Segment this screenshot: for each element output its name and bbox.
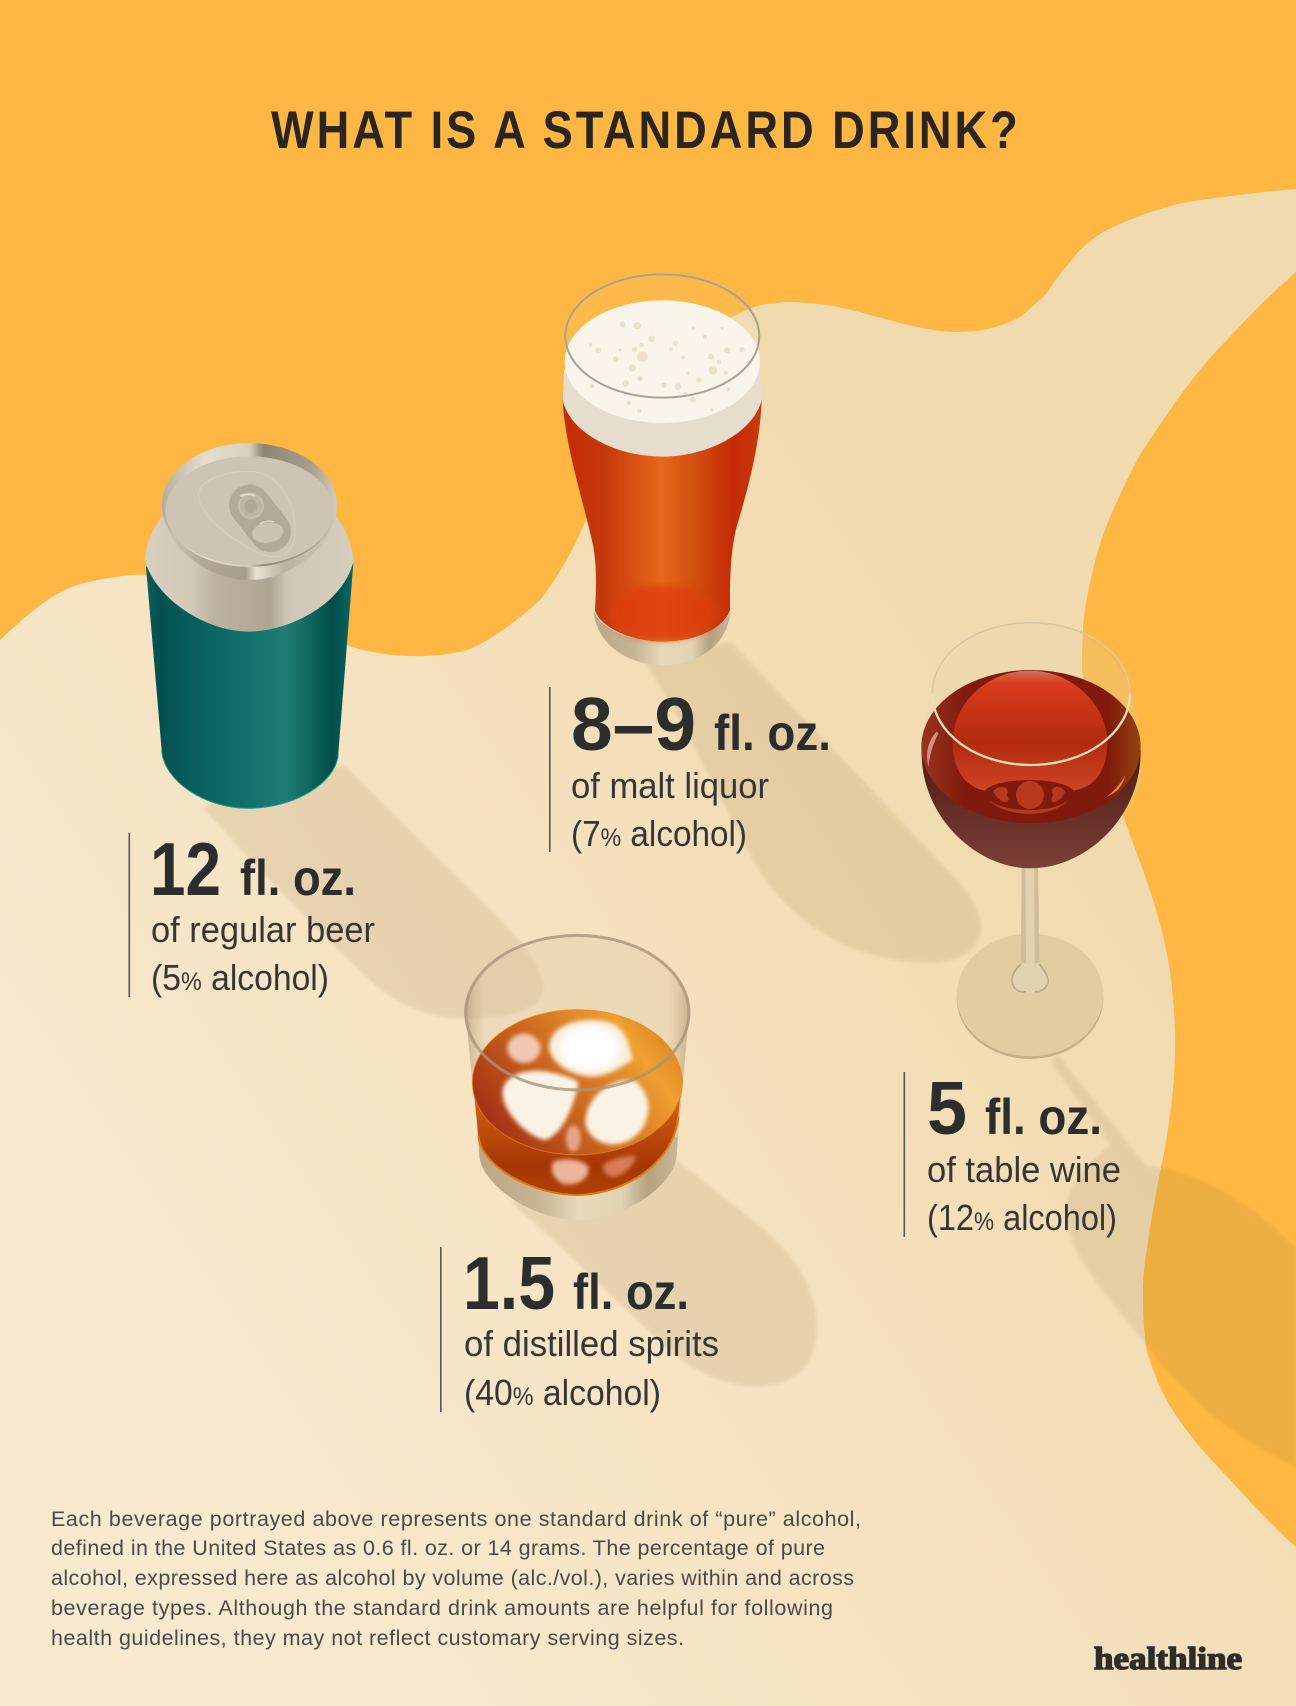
glass base (479, 1137, 678, 1220)
beer can illustration (145, 443, 353, 808)
foam side (563, 367, 762, 457)
beer bottom glow (609, 585, 716, 640)
stem reflection (988, 781, 1068, 814)
can shoulder (145, 517, 353, 632)
label: regular beer: (5% alcohol) (151, 957, 329, 998)
label: distilled spirits: of distilled spirits (464, 1323, 719, 1364)
glass bowl (921, 623, 1142, 868)
wine surface (921, 670, 1141, 823)
wine reflection (953, 671, 1107, 791)
footnote text: beverage types. Although the standard drink amounts are helpful for following (51, 1596, 833, 1620)
foam top (565, 300, 760, 423)
label: table wine (904, 1066, 1121, 1238)
whiskey bottom edge (478, 1117, 678, 1195)
label: table wine: (12% alcohol) (927, 1197, 1117, 1238)
label: distilled spirits: (40% alcohol) (464, 1372, 661, 1413)
footnote text: alcohol, expressed here as alcohol by volume (alc./vol.), varies within and across (51, 1566, 854, 1590)
label: malt liquor: 8–9 (571, 682, 696, 766)
footnote text: health guidelines, they may not reflect customary serving sizes. (51, 1626, 684, 1650)
label: regular beer: fl. oz. (240, 850, 356, 906)
beer body (563, 387, 762, 642)
can lid (165, 456, 333, 565)
label: regular beer: of regular beer (151, 909, 375, 950)
ice cube left (502, 1071, 578, 1140)
whiskey side (473, 1080, 682, 1195)
whiskey surface (472, 1010, 682, 1155)
label: distilled spirits: fl. oz. (573, 1264, 689, 1320)
footnote text: Each beverage portrayed above represents one standard drink of “pure” alcohol, (51, 1507, 861, 1531)
ice cube right (585, 1080, 648, 1145)
title: WHAT IS A STANDARD DRINK? (271, 101, 1021, 160)
label: table wine: fl. oz. (985, 1089, 1102, 1145)
glass wall (466, 935, 689, 1153)
label: table wine: of table wine (927, 1149, 1121, 1190)
can rim (162, 443, 337, 580)
whiskey glass illustration (466, 935, 689, 1220)
can rim top (162, 443, 337, 567)
label: regular beer: 12 (150, 827, 221, 911)
pull tab (221, 476, 299, 560)
wine glass illustration (921, 623, 1142, 1059)
glass stem (1012, 867, 1048, 993)
glass rim (466, 935, 689, 1090)
can bottom edge highlight (162, 750, 338, 808)
label: malt liquor: fl. oz. (714, 705, 831, 761)
pint glass illustration (563, 274, 762, 665)
glass rim (565, 274, 759, 398)
foam bubbles (589, 321, 745, 413)
label: regular beer (128, 827, 375, 998)
glass rim (932, 623, 1130, 693)
ice cube top (549, 1020, 633, 1077)
label: distilled spirits: 1.5 (463, 1241, 555, 1325)
label: table wine: 5 (927, 1066, 967, 1150)
wine highlights (927, 732, 938, 767)
label: malt liquor: of malt liquor (571, 765, 769, 806)
background: drink shadows (202, 642, 1296, 1467)
glass foot (957, 934, 1103, 1059)
footnote text (51, 1507, 861, 1650)
label: distilled spirits (440, 1241, 719, 1413)
label: malt liquor: (7% alcohol) (571, 813, 747, 854)
can body (146, 563, 353, 808)
wine body (922, 750, 1141, 868)
glass base (593, 610, 731, 665)
healthline logo: healthline (1094, 1640, 1242, 1676)
label: malt liquor (549, 682, 831, 854)
small ice fragments (507, 1034, 637, 1184)
footnote text: defined in the United States as 0.6 fl. oz. or 14 grams. The percentage of pure (51, 1536, 825, 1560)
